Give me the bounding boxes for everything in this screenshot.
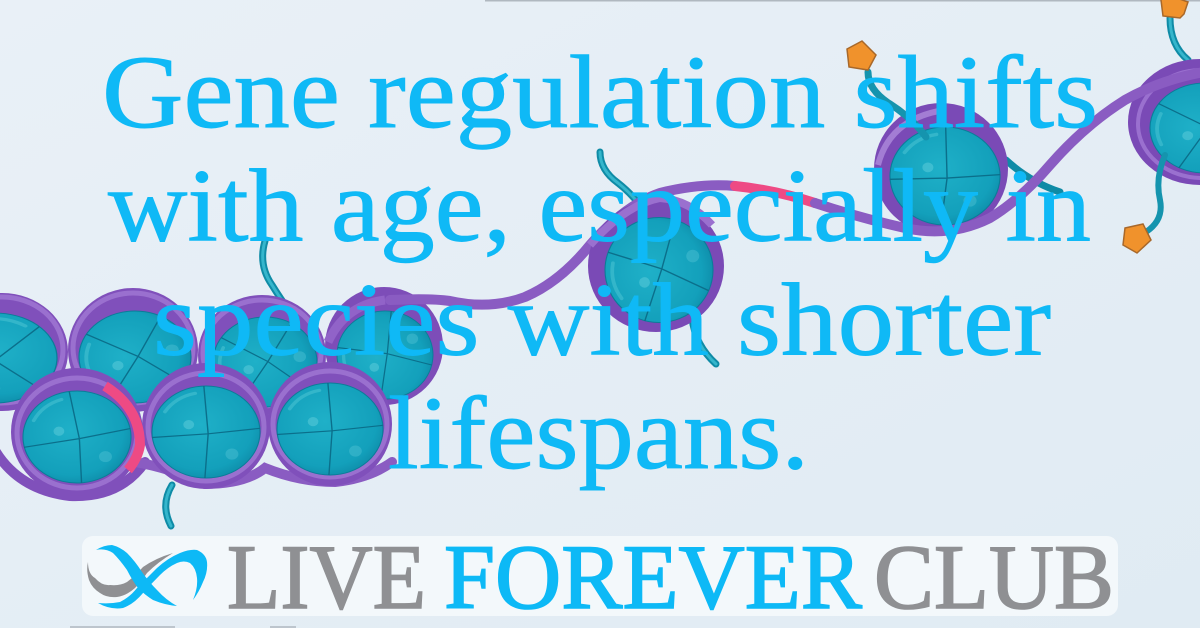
logo text: CLUB: CLUB bbox=[874, 526, 1114, 628]
tails behind bbox=[166, 18, 1188, 526]
icon: orange pentagon left bbox=[847, 41, 876, 70]
title: lifespans. bbox=[388, 376, 809, 491]
lower right tail bbox=[1146, 155, 1165, 232]
nucleosome upper right bbox=[874, 103, 1008, 235]
icon: infinity swoosh bbox=[87, 545, 207, 608]
nucleosome far right bbox=[1128, 59, 1200, 191]
icon: orange pentagon lower right bbox=[1123, 224, 1151, 253]
title: with age, especially in bbox=[108, 148, 1091, 264]
nucleosome cluster front row bbox=[11, 362, 392, 496]
right DNA strand bbox=[905, 72, 1200, 231]
logo text: LIVE: LIVE bbox=[227, 526, 426, 628]
pink marked DNA on first nucleosome bbox=[105, 386, 140, 470]
logo text: FOREVER: FOREVER bbox=[444, 526, 863, 628]
nucleosome centre bbox=[588, 198, 729, 338]
central DNA strand bbox=[390, 185, 905, 305]
left strand and linker bbox=[0, 452, 392, 496]
title: Gene regulation shifts bbox=[102, 35, 1098, 150]
logo background bbox=[82, 536, 1118, 616]
icon: orange pentagon top right bbox=[1160, 0, 1188, 18]
tail over upper right nucleosome bbox=[868, 72, 926, 137]
bottom edge lines bbox=[70, 626, 296, 628]
nucleosome cluster back row bbox=[0, 287, 443, 425]
top edge line bbox=[485, 0, 1200, 2]
title: species with shorter bbox=[153, 262, 1051, 378]
